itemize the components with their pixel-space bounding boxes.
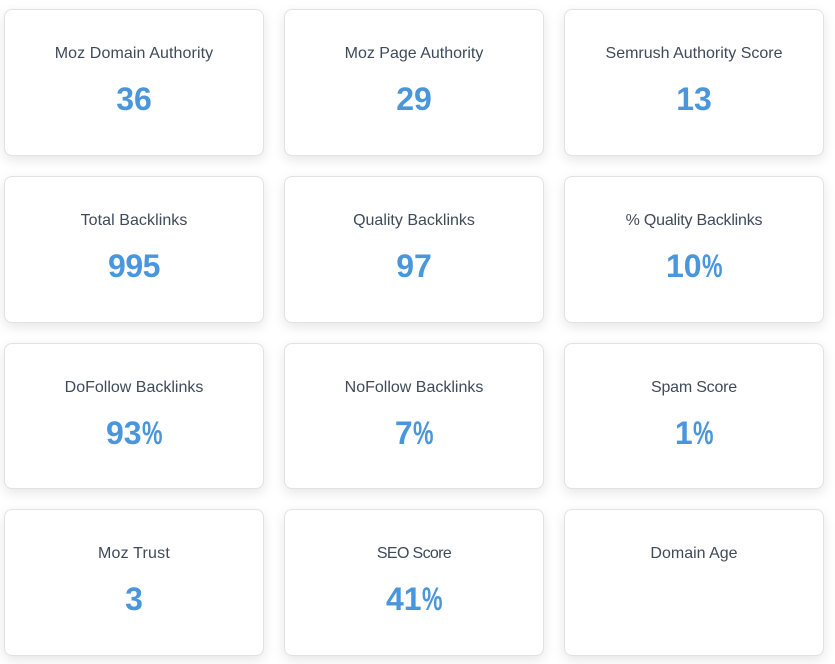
label: SEO Score [377, 545, 451, 562]
label: DoFollow Backlinks [65, 379, 203, 396]
value: 36 [116, 81, 152, 117]
panel: Moz Page Authority [284, 9, 544, 156]
label: Domain Age [650, 545, 738, 562]
panel: % Quality Backlinks [564, 176, 824, 323]
value: 10 [666, 248, 702, 284]
value [666, 248, 722, 284]
panel: Domain Age [564, 509, 824, 656]
label: Quality Backlinks [353, 212, 475, 229]
value: 97 [396, 248, 432, 284]
panel: Spam Score [564, 343, 824, 489]
label: Moz Page Authority [345, 45, 483, 62]
label: NoFollow Backlinks [345, 379, 483, 396]
value [675, 415, 713, 451]
panel: DoFollow Backlinks [4, 343, 264, 489]
label: Spam Score [651, 379, 737, 396]
value: 93 [106, 415, 142, 451]
label: Moz Trust [98, 545, 170, 562]
panel: NoFollow Backlinks [284, 343, 544, 489]
panel: Quality Backlinks [284, 176, 544, 323]
label: % Quality Backlinks [626, 212, 762, 229]
value [106, 415, 162, 451]
panel: Total Backlinks [4, 176, 264, 323]
value: % [693, 415, 713, 451]
value [386, 581, 442, 617]
value: % [702, 248, 722, 284]
value: 41 [386, 581, 422, 617]
value: % [413, 415, 433, 451]
panel: Moz Domain Authority [4, 9, 264, 156]
label: Total Backlinks [81, 212, 187, 229]
value: 995 [108, 248, 160, 284]
label: Semrush Authority Score [606, 45, 782, 62]
value: 3 [125, 581, 143, 617]
value: 7 [395, 415, 413, 451]
panel: Moz Trust [4, 509, 264, 656]
panel: SEO Score [284, 509, 544, 656]
value: % [142, 415, 162, 451]
value: 29 [396, 81, 432, 117]
panel: Semrush Authority Score [564, 9, 824, 156]
value: 13 [676, 81, 712, 117]
value: 1 [675, 415, 693, 451]
value [395, 415, 433, 451]
value: % [422, 581, 442, 617]
label: Moz Domain Authority [55, 45, 213, 62]
